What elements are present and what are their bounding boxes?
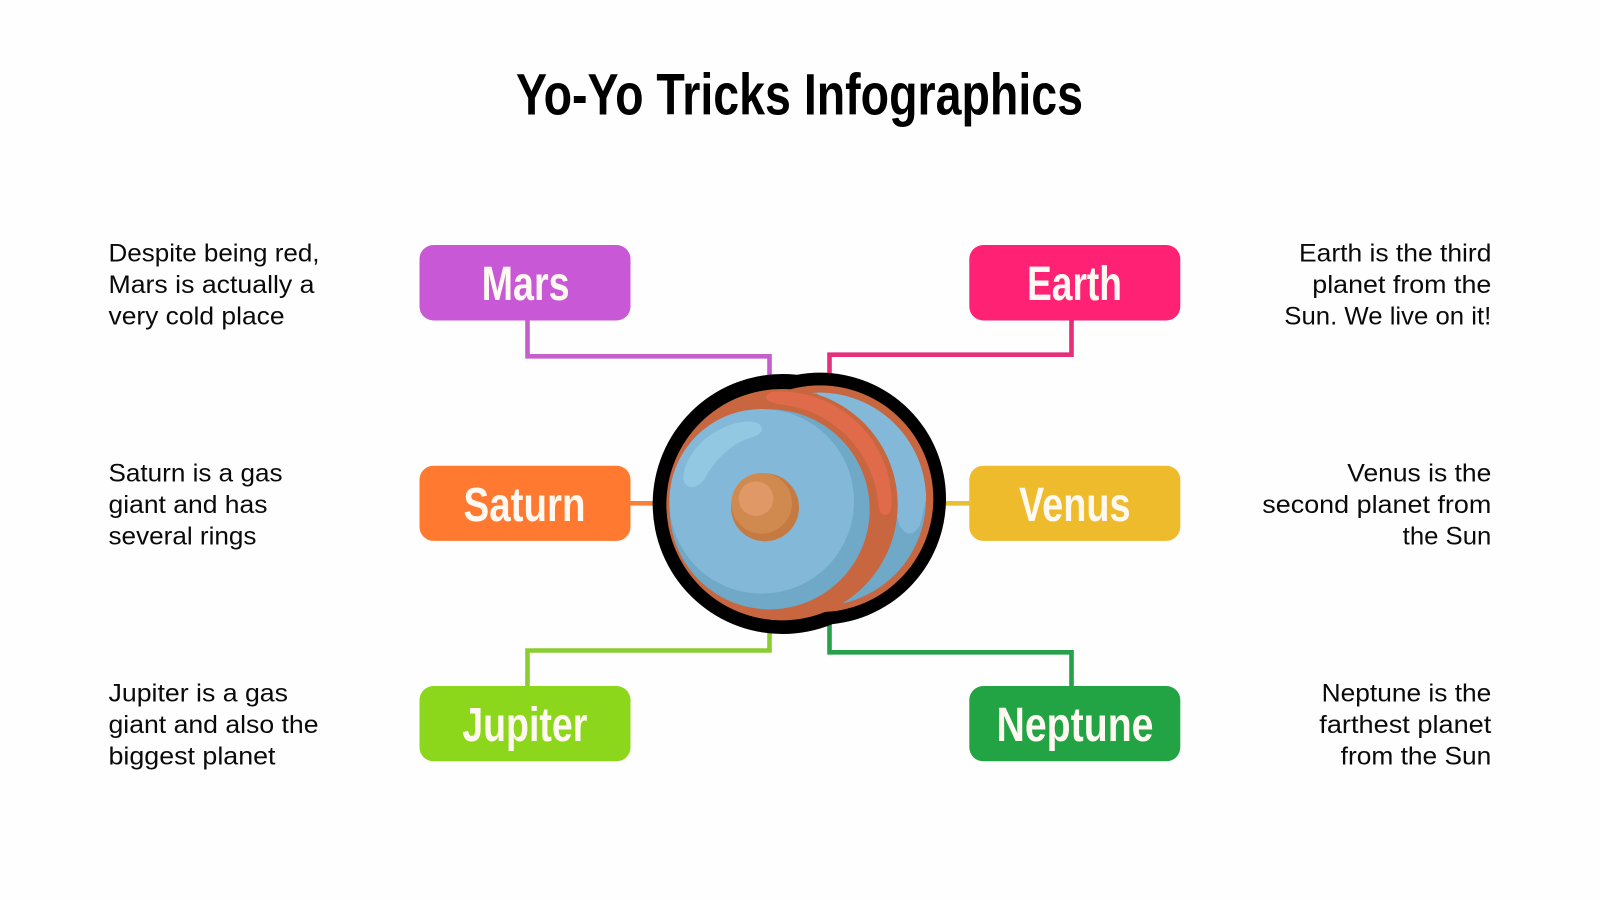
Jupiter description: biggest planet (108, 743, 276, 771)
Earth label box (969, 245, 1180, 320)
title: Yo-Yo Tricks Infographics (516, 62, 1083, 128)
yo-yo hub (731, 473, 799, 541)
connector: Mars (528, 320, 770, 385)
yo-yo black outline (653, 373, 946, 634)
Jupiter description: Jupiter is a gas (108, 680, 288, 708)
Mars label: Mars (482, 258, 570, 311)
panel: Mars (108, 240, 630, 331)
Mars description: Mars is actually a (108, 271, 315, 299)
Jupiter label box (420, 686, 630, 761)
Venus label box (969, 466, 1180, 541)
Earth label: Earth (1027, 258, 1122, 311)
Jupiter label: Jupiter (462, 699, 587, 752)
panel: Saturn (108, 460, 630, 551)
Mars description: Despite being red, (108, 240, 320, 268)
yo-yo back disc (707, 385, 933, 612)
Saturn label: Saturn (464, 479, 586, 532)
Mars description (108, 240, 320, 331)
Neptune description (1319, 680, 1491, 771)
Venus description: the Sun (1403, 523, 1491, 551)
Venus label: Venus (1019, 479, 1130, 532)
Earth description (1284, 240, 1491, 331)
connector: Jupiter (528, 625, 770, 687)
panel: Earth (969, 240, 1491, 331)
panel: Venus (969, 460, 1491, 551)
Neptune description: Neptune is the (1322, 680, 1491, 708)
connector: Saturn (630, 501, 660, 506)
Saturn description (108, 460, 282, 551)
Saturn description: several rings (108, 523, 256, 551)
Mars label box (420, 245, 630, 320)
Jupiter description (108, 680, 318, 771)
Saturn description: giant and has (108, 491, 268, 519)
Saturn label box (420, 466, 630, 541)
connector: Earth (830, 320, 1072, 380)
Neptune label box (969, 686, 1180, 761)
panel: Neptune (969, 680, 1491, 771)
Neptune description: farthest planet (1319, 711, 1491, 739)
panel: Jupiter (108, 680, 630, 771)
Saturn description: Saturn is a gas (108, 460, 282, 488)
Venus description: Venus is the (1347, 460, 1491, 488)
Earth description: Earth is the third (1299, 240, 1491, 268)
Earth description: Sun. We live on it! (1284, 303, 1491, 331)
Jupiter description: giant and also the (108, 711, 318, 739)
Neptune description: from the Sun (1341, 743, 1491, 771)
Venus description (1262, 460, 1491, 551)
connector: Neptune (830, 620, 1072, 687)
connector: Venus (940, 501, 970, 506)
Earth description: planet from the (1312, 271, 1491, 299)
icon: yo-yo (653, 373, 946, 634)
Neptune label: Neptune (996, 699, 1154, 752)
Venus description: second planet from (1262, 491, 1491, 519)
yo-yo front disc (666, 389, 898, 620)
Mars description: very cold place (108, 303, 284, 331)
